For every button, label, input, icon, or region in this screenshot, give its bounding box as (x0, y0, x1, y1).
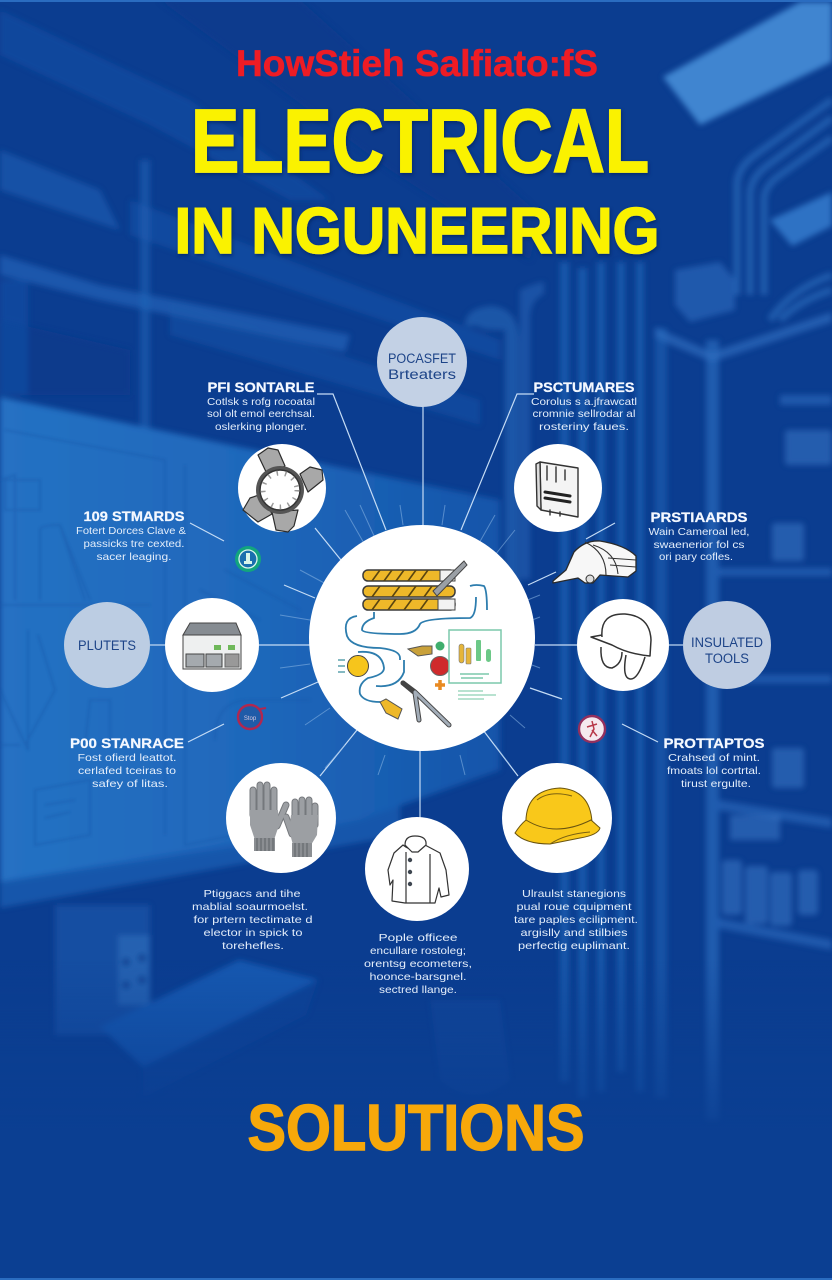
text block: upper-left (207, 379, 315, 433)
icon: yellow hard hat (502, 763, 612, 873)
cabinet frame (655, 328, 667, 1098)
text block: gloves caption: for prtern tectimate d (194, 914, 313, 926)
text block: upper-right: PSCTUMARES (534, 379, 634, 395)
screwdriver (433, 561, 467, 596)
text block: left upper: sacer leaging. (96, 551, 172, 563)
text block: gloves caption: Ptiggacs and tihe (204, 888, 301, 900)
icon: electrical box (514, 444, 602, 532)
left label circle: PLUTETS: PLUTETS (78, 638, 136, 653)
text block: left upper: 109 STMARDS (84, 508, 184, 524)
text block: upper-right: cromnie sellrodar al (532, 408, 636, 420)
conduit pipes (737, 100, 832, 320)
text block: shirt caption: sectred llange. (379, 984, 457, 996)
text block: right lower: PROTTAPTOS (664, 735, 764, 751)
text block: left upper (76, 508, 186, 563)
blue wires (346, 585, 487, 702)
connector lines and rays (150, 394, 683, 818)
text block: gloves caption (192, 888, 313, 952)
text block: hard hat caption: argislly and stilbies (520, 927, 628, 939)
text block: right lower: Crahsed of mint. (668, 752, 760, 764)
icon: red prohibition badge: Stop (244, 716, 257, 722)
text block: right upper: ori pary cofles. (659, 551, 733, 563)
title: IN NGUNEERING: IN NGUNEERING (174, 194, 660, 267)
text block: upper-right (531, 379, 637, 433)
icon: circular gear component (238, 444, 326, 532)
skylight (663, 2, 832, 125)
icon: red prohibition badge (238, 705, 266, 729)
faint blueprint lines (0, 430, 310, 845)
text block: hard hat caption: pual roue cquipment (516, 901, 632, 913)
icon: hard hat with ear protection outline (577, 599, 669, 691)
icon: protective shirt (365, 817, 469, 921)
top node: Breakers label circle: Brteaters (388, 367, 456, 382)
floor machine (55, 905, 150, 1035)
chart card (449, 630, 501, 683)
text block: hard hat caption: tare paples ecilipment. (514, 914, 638, 926)
text block: left upper: Fotert Dorces Clave & (76, 525, 186, 537)
text block: upper-left: Cotlsk s rofg rocoatal (207, 396, 315, 408)
text block: shirt caption: encullare rostoleg; (370, 945, 466, 957)
text block: right upper (648, 509, 750, 563)
text block: left upper: passicks tre cexted. (84, 538, 184, 550)
text block: left lower: P00 STANRACE (70, 735, 184, 751)
right pipes (560, 262, 644, 1098)
top node: Breakers label circle: POCASFET (388, 351, 456, 366)
text block: upper-right: Corolus s a.jfrawcatl (531, 396, 637, 408)
text block: gloves caption: torehefles. (222, 940, 284, 952)
text block: upper-left: sol olt emol eerchsal. (207, 408, 315, 420)
pliers (403, 683, 449, 725)
footer heading: SOLUTIONS: SOLUTIONS (248, 1091, 584, 1164)
ceiling beams (0, 10, 330, 200)
text block: right upper: PRSTIAARDS (650, 509, 748, 525)
title: ELECTRICAL: ELECTRICAL (191, 92, 649, 192)
text block: right lower: tirust ergulte. (681, 778, 751, 790)
text block: upper-left: PFI SONTARLE (208, 379, 314, 395)
text block: left lower: Fost ofierd leattot. (78, 752, 176, 764)
right label circle: INSULATED TOOLS: TOOLS (705, 651, 749, 666)
title: red tagline: HowStieh Salfiato:fS (236, 43, 598, 84)
icon: safety shoe sketch (553, 541, 636, 583)
icon: insulated gloves (226, 763, 336, 873)
text block: right lower: fmoats lol cortrtal. (667, 765, 761, 777)
shelves (718, 395, 832, 950)
text block: shirt caption: orentsg ecometers, (364, 958, 472, 970)
right label circle: INSULATED TOOLS (683, 601, 771, 689)
text block: hard hat caption (514, 888, 638, 952)
central hub illustration (309, 525, 535, 751)
text block: right lower (664, 735, 764, 790)
text block: shirt caption (364, 932, 472, 996)
text block: gloves caption: elector in spick to (204, 927, 303, 939)
top node: Breakers label circle (377, 317, 467, 407)
text block: right upper: Wain Cameroal led, (648, 526, 750, 538)
insulated wire bundle (363, 570, 455, 610)
right label circle: INSULATED TOOLS: INSULATED (691, 635, 763, 650)
text block: hard hat caption: perfectig euplimant. (518, 940, 630, 952)
text block: left lower: safey of litas. (92, 778, 168, 790)
left whiteboard panel (0, 397, 500, 882)
text block: left lower (70, 735, 184, 790)
text block: gloves caption: mablial soaurmoelst. (192, 901, 308, 913)
text block: shirt caption: hoonce-barsgnel. (370, 971, 466, 983)
text block: right upper: swaenerior fol cs (654, 539, 744, 551)
text block: hard hat caption: Ulraulst stanegions (522, 888, 626, 900)
text block: upper-left: oslerking plonger. (215, 421, 307, 433)
icon: electrical panel (165, 598, 259, 692)
left label circle: PLUTETS (64, 602, 150, 688)
text block: left lower: cerlafed tceiras to (78, 765, 176, 777)
text block: shirt caption: Pople officee (378, 932, 458, 944)
icon: green safety badge (235, 546, 261, 572)
mid floor glow (430, 1000, 510, 1095)
icon: warning badge (579, 716, 605, 742)
text block: upper-right: rosteriny faues. (539, 421, 629, 433)
